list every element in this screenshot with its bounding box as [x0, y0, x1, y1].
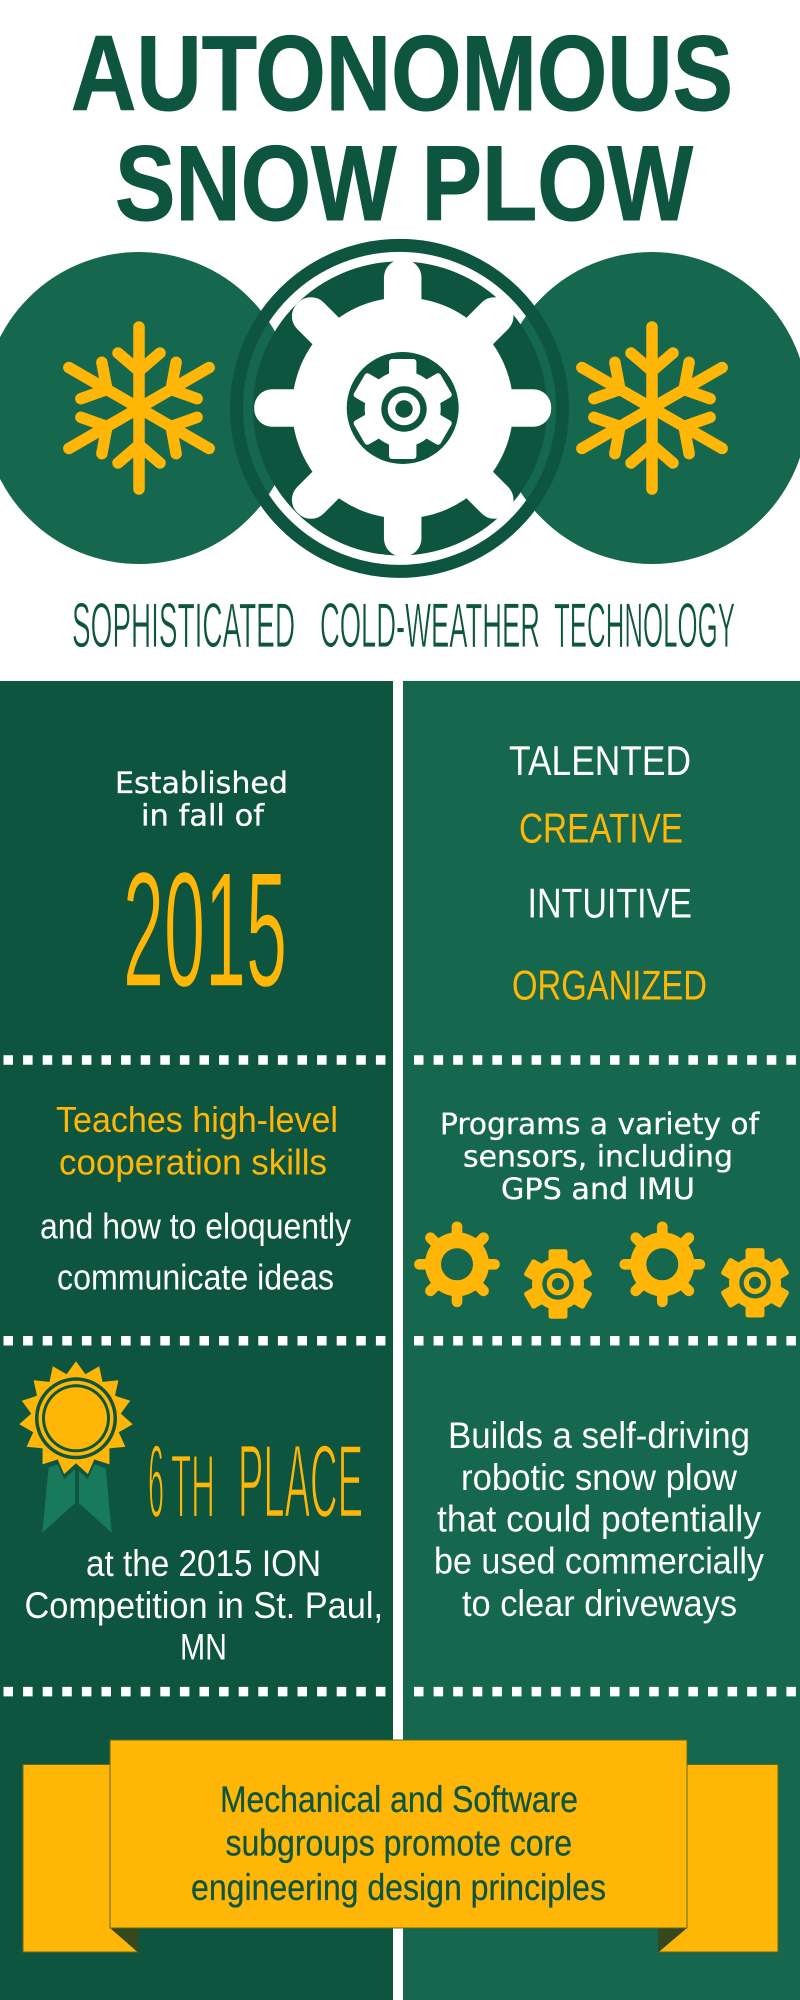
title — [71, 13, 733, 243]
label: established: Established — [115, 766, 288, 800]
panel: right column background — [403, 681, 800, 2000]
block: competition text: MN — [180, 1626, 227, 1668]
block: cooperation skills: and how to eloquently — [40, 1206, 351, 1246]
banner — [23, 1740, 778, 1952]
icon: right snowflake — [571, 327, 733, 489]
block: sensors text: Programs a variety of — [440, 1107, 760, 1141]
block: sensors text: GPS and IMU — [501, 1172, 695, 1206]
banner text: subgroups promote core — [226, 1823, 572, 1864]
block: competition text: Competition in St. Paul, — [24, 1585, 383, 1626]
heading: 6th place: 6 — [148, 1424, 164, 1540]
panel: left column background — [0, 681, 393, 2000]
block: sensors text: sensors, including — [463, 1140, 733, 1174]
subtitle: SOPHISTICATED — [72, 591, 295, 661]
icon: gear 2 — [523, 1249, 593, 1319]
icon: large white gear — [254, 260, 551, 556]
block: cooperation skills — [40, 1099, 351, 1298]
block: builds a snow plow text: to clear driveways — [462, 1583, 737, 1624]
block: builds a snow plow text: Builds a self-driving — [448, 1415, 750, 1456]
text: PLACE — [238, 1424, 363, 1540]
rosette — [19, 1361, 133, 1479]
left circle — [0, 252, 295, 564]
icon: gear 3 — [625, 1227, 700, 1302]
icons: row of yellow gears — [420, 1227, 790, 1319]
banner right tail — [658, 1764, 778, 1952]
banner main panel — [110, 1740, 687, 1928]
title line 2: SNOW PLOW — [115, 123, 693, 243]
icon: gear 1 — [420, 1227, 494, 1302]
hero emblem: snowflakes and gear — [0, 245, 800, 571]
outer ring — [236, 245, 562, 571]
block: qualities list: ORGANIZED — [512, 962, 707, 1009]
heading: 6th place — [148, 1424, 363, 1540]
icon: award medal — [19, 1361, 133, 1533]
banner text — [191, 1779, 606, 1908]
dark disc — [253, 261, 547, 555]
block: qualities list: CREATIVE — [519, 805, 683, 852]
heading: 6th place: TH — [171, 1437, 215, 1537]
block: sensors text — [440, 1107, 760, 1206]
block: competition text: at the 2015 ION — [86, 1543, 321, 1584]
ribbon — [42, 1460, 112, 1533]
icon: gear 4 — [720, 1248, 790, 1318]
icon: centre cog — [347, 352, 459, 464]
block: builds a snow plow text: be used commercially — [434, 1541, 764, 1582]
block: established in fall of 2015 — [115, 766, 288, 1021]
label: established: in fall of — [141, 799, 265, 833]
banner left tail — [23, 1764, 138, 1952]
block: cooperation skills: communicate ideas — [57, 1257, 334, 1298]
block: qualities list: INTUITIVE — [528, 880, 692, 927]
banner text: engineering design principles — [191, 1867, 606, 1908]
block: qualities list: TALENTED — [509, 737, 691, 784]
banner text: Mechanical and Software — [220, 1779, 578, 1820]
banner right fold — [658, 1928, 687, 1952]
block: qualities list — [509, 737, 707, 1009]
block: builds a snow plow text: robotic snow plow — [461, 1457, 737, 1498]
block: cooperation skills: cooperation skills — [59, 1141, 327, 1182]
block: competition text — [24, 1543, 383, 1668]
banner left fold — [110, 1928, 138, 1952]
icon: left snowflake — [58, 327, 220, 489]
label: established — [115, 766, 288, 833]
right circle — [496, 252, 800, 564]
block: builds a snow plow text — [434, 1415, 764, 1624]
text: 2015 — [123, 838, 287, 1021]
block: cooperation skills: Teaches high-level — [56, 1099, 338, 1140]
block: builds a snow plow text: that could potentially — [437, 1499, 761, 1540]
